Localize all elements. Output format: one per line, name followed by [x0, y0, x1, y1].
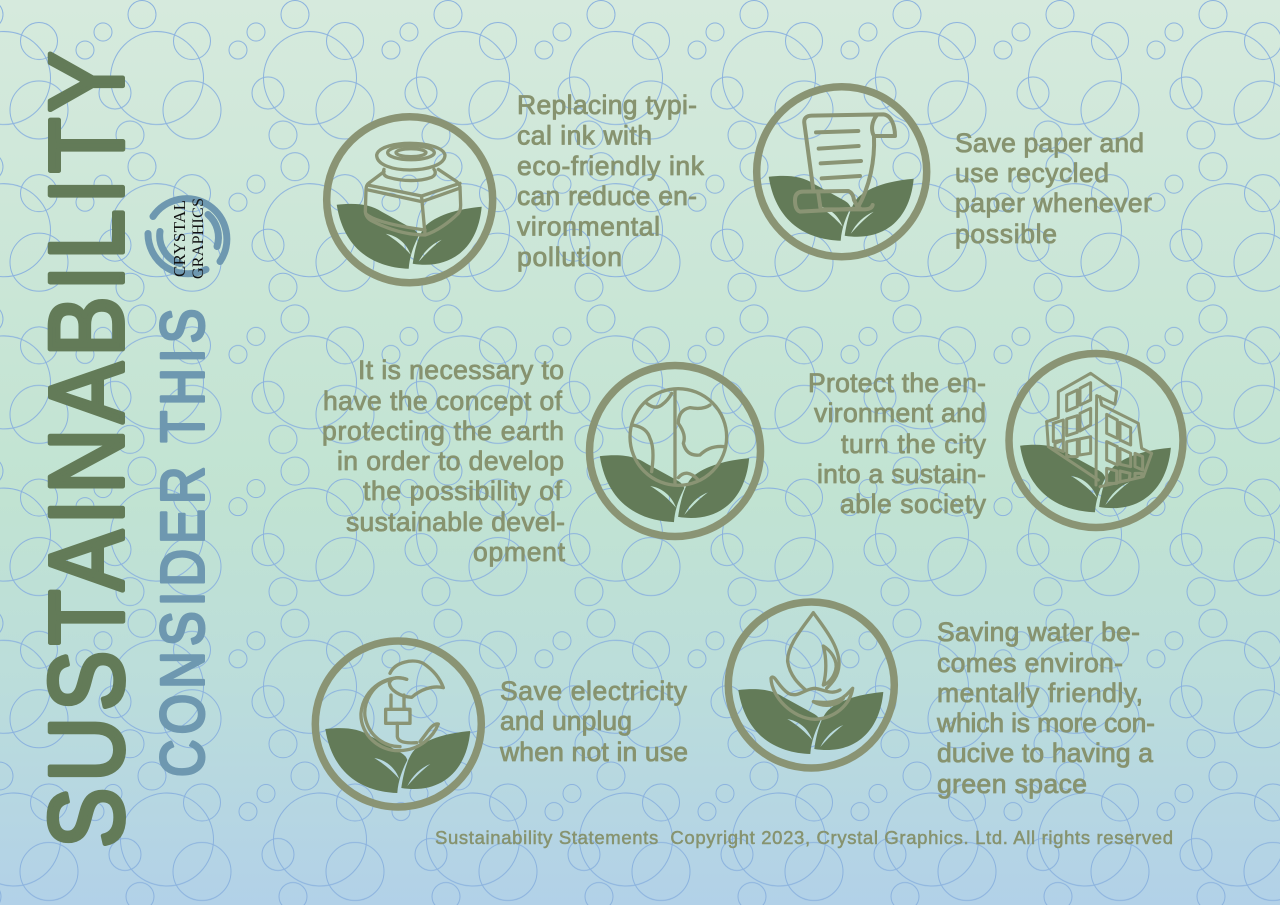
logo: Crystal Graphics	[148, 198, 227, 279]
logo rings	[148, 199, 227, 274]
text: water: mentally friendly,	[937, 678, 1143, 708]
text: city: vironment and	[814, 398, 986, 428]
icon: ink bottle	[327, 117, 493, 283]
text: city: into a sustain-	[817, 459, 986, 489]
text: water: which is more con-	[936, 708, 1155, 738]
text: earth: protecting the earth	[322, 416, 564, 446]
text: earth: opment	[473, 537, 566, 567]
text: city: turn the city	[841, 429, 987, 459]
text: city: Protect the en-	[808, 368, 986, 398]
icon: city building	[1009, 354, 1183, 528]
text: city: able society	[840, 489, 987, 519]
icon: paper scroll	[757, 87, 927, 257]
text: earth: have the concept of	[323, 386, 563, 416]
icon: electric plug	[315, 641, 481, 807]
text: ink: cal ink with	[517, 120, 652, 150]
text: ink: can reduce en-	[517, 181, 697, 211]
icon: water drop	[728, 602, 894, 768]
text: paper: possible	[955, 219, 1057, 249]
text: paper: paper whenever	[955, 188, 1152, 218]
text: earth: sustainable devel-	[346, 507, 565, 537]
text: electricity	[499, 676, 688, 767]
logo text	[170, 198, 207, 279]
text: water: green space	[937, 769, 1087, 799]
text: earth: in order to develop	[337, 446, 564, 476]
text: earth	[322, 355, 566, 567]
text: ink	[517, 90, 705, 272]
subtitle: CONSIDER THIS: CONSIDER THIS	[149, 309, 216, 777]
logo text: CRYSTAL	[170, 200, 189, 277]
text: water	[936, 617, 1155, 799]
text: water: comes environ-	[937, 648, 1123, 678]
text: city	[808, 368, 987, 519]
text: water: Saving water be-	[937, 617, 1140, 647]
text: paper	[955, 128, 1152, 249]
text: ink: pollution	[517, 242, 622, 272]
text: electricity: Save electricity	[500, 676, 688, 706]
text: water: ducive to having a	[937, 738, 1153, 768]
text: earth: It is necessary to	[358, 355, 564, 385]
text: paper: use recycled	[955, 158, 1109, 188]
text: electricity: and unplug	[500, 706, 632, 736]
logo text: GRAPHICS	[190, 198, 207, 279]
icon: earth	[590, 366, 760, 536]
title: SUSTAINABILITY: SUSTAINABILITY	[27, 52, 145, 848]
text: ink: vironmental	[517, 212, 660, 242]
footer copyright: Sustainability Statements Copyright 2023, Crystal Graphics. Ltd. All rights reserved	[435, 827, 1173, 848]
text: paper: Save paper and	[955, 128, 1144, 158]
text: ink: Replacing typi-	[517, 90, 697, 120]
text: earth: the possibility of	[363, 476, 563, 506]
text: ink: eco-friendly ink	[517, 151, 705, 181]
text: electricity: when not in use	[499, 737, 688, 767]
